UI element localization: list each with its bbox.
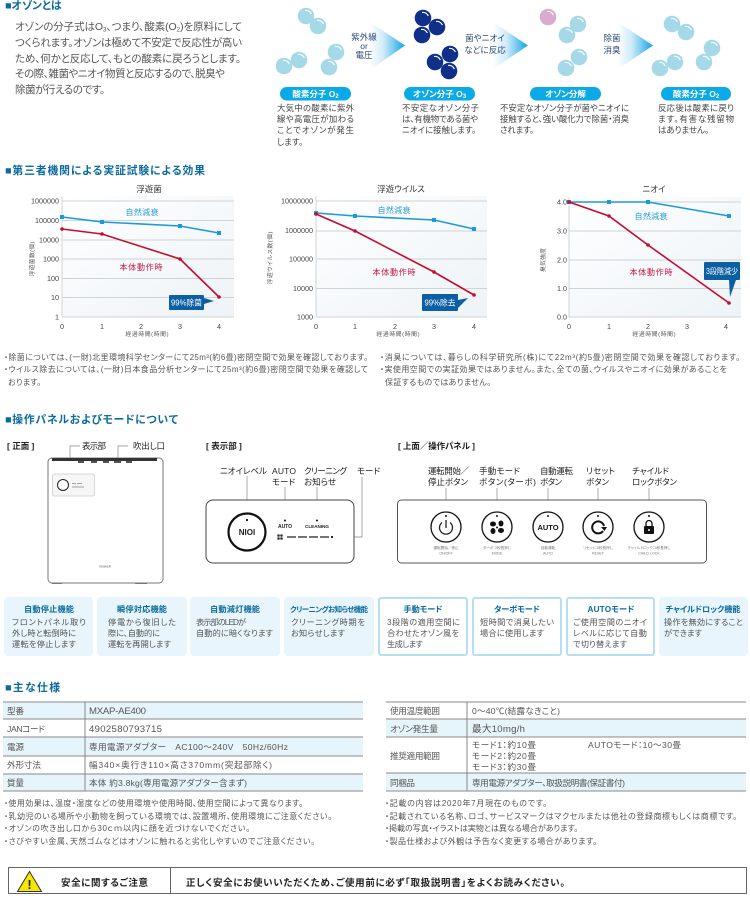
- chart: airborne virus: 1000: [297, 312, 313, 322]
- device front: [48, 458, 163, 584]
- table: specs right: モード2：約20畳: [472, 750, 536, 761]
- card: cleaning notice: お知らせします: [291, 628, 345, 638]
- panel: front view: [7, 441, 165, 584]
- chart: odor: 0.0: [557, 312, 567, 322]
- chart: airborne virus: 浮遊ウイルス数(個): [266, 231, 274, 284]
- chart: airborne bacteria: 浮遊菌: [136, 184, 162, 194]
- table: specs left: 幅340×奥行き110×高さ370mm(突起部除く): [89, 759, 272, 770]
- card: manual mode: 手動モード: [404, 604, 443, 614]
- card: manual mode: 合わせたオゾン風を: [387, 628, 459, 638]
- chart: airborne bacteria: 100000: [35, 216, 59, 225]
- chart: airborne bacteria: 3: [178, 322, 182, 331]
- arrow: sterilize and deodorize: 消臭: [603, 45, 621, 55]
- card: auto mode: で切り替えます: [573, 639, 627, 649]
- chart: airborne virus: 10000: [293, 284, 313, 293]
- text block: ozone description: )を原料にして: [180, 20, 242, 33]
- step 2: ozone molecule: [402, 87, 479, 135]
- heading: main specs: ■主な仕様: [5, 680, 60, 694]
- panel: display: モード: [357, 466, 380, 476]
- step 1: oxygen molecule: 大気中の酸素に紫外: [277, 103, 355, 113]
- table: specs left: 型番: [7, 705, 24, 716]
- step 4: back to oxygen: はありません。: [658, 125, 709, 135]
- display box: NIOI: [239, 528, 255, 537]
- control box: 自動運転: [541, 545, 556, 550]
- chart: airborne bacteria: 0: [60, 322, 64, 331]
- text block: spec notes left: ・さびやすい金属、天然ゴムなどはオゾンに触れると劣化しやすいのでご注意ください。: [4, 836, 315, 846]
- step 2: ozone molecule: 不安定なオゾン分子: [402, 103, 479, 113]
- chart: airborne bacteria: 1000000: [31, 196, 59, 206]
- panel: display: モード: [272, 477, 295, 487]
- step 4: back to oxygen: [658, 87, 734, 135]
- card: auto mode: AUTOモード: [588, 605, 635, 614]
- panel: top control panel: ボタン(ターボ): [479, 477, 536, 487]
- text block: spec notes left: ・乳幼児のいる場所や小動物を飼っている環境では、設置場所、使用環境にご注意ください。: [4, 811, 332, 821]
- icon: auto: AUTO: [537, 523, 559, 532]
- step 3: ozone decomposition: オゾン分解: [545, 89, 586, 99]
- chart: odor: 1: [607, 322, 611, 331]
- panel: top control panel: 運転開始／: [428, 466, 469, 476]
- display box: [206, 500, 354, 563]
- step 1: oxygen molecule: 酸素分子 O: [292, 89, 335, 99]
- chart: airborne virus: 1000000: [285, 226, 313, 235]
- text block: ozone description: オゾンの分子式はO: [15, 21, 103, 33]
- chart: airborne virus: 経過時間(時間): [376, 330, 420, 338]
- table: specs right: 最大10mg/h: [472, 723, 525, 735]
- chart: airborne bacteria: 100: [47, 274, 59, 283]
- card: auto stop: フロントパネル取り: [12, 618, 86, 627]
- text block: ozone description: 3: [103, 26, 107, 34]
- panel: display: クリーニング: [304, 466, 348, 476]
- chart: airborne virus: 100000: [289, 254, 313, 264]
- panel: top control panel: 停止ボタン: [428, 477, 468, 487]
- icon: warning triangle: !: [27, 877, 32, 892]
- control box: RESET: [592, 552, 605, 556]
- text block: test notes left: ・除菌については、(一財)北里環境科学センターにて25m³(約6畳)密閉空間で効果を確認しております。: [4, 352, 368, 362]
- control box: CHILD LOCK: [638, 552, 660, 556]
- panel: top control panel: ロックボタン: [632, 477, 677, 487]
- step 1: oxygen molecule: 線や高電圧が加わる: [277, 114, 354, 124]
- card: cleaning notice: クリーニングお知らせ機能: [290, 604, 368, 614]
- arrow: reaction with bacteria and odor: などに反応: [464, 45, 506, 55]
- table: specs right: 使用温度範囲: [390, 705, 440, 716]
- chart: odor: 臭気強度: [539, 248, 547, 272]
- callout: 99% bacteria removed: [169, 295, 214, 310]
- cards: functions and modes: [4, 597, 748, 656]
- chart: odor: 2: [646, 322, 650, 331]
- card: cleaning notice: クリーニング時期を: [291, 617, 365, 627]
- panel: top control panel: 手動モード: [479, 466, 520, 476]
- card: cleaning notice: [284, 597, 374, 656]
- chart: odor: 経過時間(時間): [632, 330, 676, 338]
- safety notice: [8, 867, 746, 894]
- arrow: UV or high voltage: 電圧: [355, 50, 373, 60]
- chart: airborne virus: 2: [393, 322, 397, 331]
- card: auto mode: ご使用空間のニオイ: [573, 617, 647, 627]
- card: power recovery: 運転を再開します: [108, 639, 171, 649]
- control box: ターボ：2秒長押し: [483, 545, 512, 550]
- chart: odor: 2.0: [557, 256, 567, 264]
- callout: 99% virus removed: 99%除去: [424, 298, 456, 308]
- text block: spec notes left: ・オゾンの吹き出し口から30ｃｍ以内に顔を近づけないでください。: [4, 823, 250, 833]
- step 3: ozone decomposition: されます。: [500, 125, 534, 135]
- step 2: ozone molecule: ニオイに接触します。: [402, 125, 476, 135]
- safety notice: 正しく安全にお使いいただくため、ご使用前に必ず「取扱説明書」をよくお読みください。: [186, 877, 565, 889]
- control box: AUTO: [543, 552, 553, 556]
- step 4: back to oxygen: 2: [716, 94, 720, 100]
- display box: AUTO: [278, 524, 292, 530]
- step 3: ozone decomposition: [500, 87, 630, 135]
- text block: spec notes right: ・製品仕様および外観は予告なく変更する場合があります。: [385, 836, 597, 846]
- panel: top control panel: ボタン: [586, 477, 609, 487]
- table: specs left: 本体 約3.8kg(専用電源アダプター含まず): [89, 777, 247, 788]
- chart: airborne bacteria: 10: [51, 293, 59, 302]
- step 2: ozone molecule: オゾン分子 O: [413, 89, 463, 99]
- table: specs left: 電源: [7, 742, 24, 752]
- heading: ozone: ■オゾンとは: [5, 0, 62, 12]
- card: manual mode: [379, 598, 467, 655]
- table: specs right: [386, 702, 746, 791]
- card: auto stop: 外し時と転倒時に: [12, 628, 76, 638]
- card: power recovery: [97, 597, 187, 656]
- heading: control panel and modes: ■操作パネルおよびモードについて: [5, 412, 178, 426]
- chart: airborne bacteria: 本体動作時: [120, 262, 162, 272]
- card: child lock: [659, 597, 748, 656]
- control box: MODE: [492, 552, 503, 556]
- table: specs right: オゾン発生量: [390, 723, 438, 734]
- panel: display: ニオイレベル: [220, 466, 268, 476]
- text block: ozone description: 除菌が行えるのです。: [15, 83, 105, 96]
- control box: ON/OFF: [439, 552, 454, 556]
- panel: top control panel: 自動運転: [540, 466, 573, 476]
- panel: front view: [ 正面 ]: [7, 441, 35, 451]
- table: specs right: AUTOモード：10～30畳: [588, 740, 681, 750]
- step 4: back to oxygen: ます。有害な残留物: [658, 114, 734, 124]
- table: specs left: 質量: [7, 778, 24, 788]
- card: auto mode: [567, 598, 654, 655]
- diagram: ozone process: [276, 8, 734, 147]
- card: turbo mode: 場合に使用します: [480, 628, 544, 638]
- chart: airborne virus: 10000000: [281, 196, 313, 206]
- card: child lock: チャイルドロック機能: [665, 604, 740, 614]
- step 3: ozone decomposition: 不安定なオゾン分子が菌やニオイに: [500, 103, 629, 113]
- panel: top control panel: リセット: [586, 466, 615, 476]
- table: specs left: 外形寸法: [7, 759, 41, 770]
- text block: ozone description: 2: [177, 26, 181, 34]
- device front: maxell: [99, 564, 111, 568]
- arrow: UV or high voltage: 紫外線: [351, 32, 377, 42]
- step 1: oxygen molecule: 2: [335, 94, 339, 100]
- table: specs right: 推奨適用範囲: [390, 750, 440, 761]
- card: auto stop: 運転を停止します: [12, 639, 76, 649]
- panel: front view: 表示部: [82, 441, 106, 451]
- table: specs left: [3, 702, 363, 791]
- text block: ozone description: 、つまり、酸素(O: [106, 20, 177, 33]
- step 1: oxygen molecule: [277, 87, 355, 147]
- panel: top control panel: チャイルド: [632, 466, 669, 476]
- text block: ozone description: その際、雑菌やニオイ物質と反応するので、脱臭や: [15, 67, 225, 80]
- chart: airborne virus: 本体動作時: [372, 267, 416, 277]
- chart: airborne bacteria: 1: [55, 312, 59, 322]
- icon: fan: [490, 520, 504, 534]
- arrow: UV or high voltage: [351, 22, 405, 70]
- icon: power: [440, 520, 453, 534]
- text block: test notes right: ・消臭については、暮らしの科学研究所(株)にて22m³(約5畳)密閉空間で効果を確認しております。: [380, 352, 740, 362]
- chart: airborne bacteria: 4: [217, 322, 221, 331]
- panel: front view: 吹出し口: [133, 441, 165, 451]
- panel: top control panel: ボタン: [540, 477, 562, 487]
- card: auto stop: [4, 597, 93, 656]
- card: power recovery: 瞬停対応機能: [117, 604, 167, 614]
- text block: spec notes left: [4, 798, 332, 846]
- arrow: reaction with bacteria and odor: [464, 22, 528, 69]
- chart: odor: 3.0: [557, 226, 567, 236]
- panel: display: [206, 441, 380, 563]
- molecules: oxygen: [276, 8, 344, 75]
- chart: odor: 自然減衰: [634, 211, 668, 221]
- chart: airborne bacteria: [28, 184, 234, 338]
- icon: reset: [592, 521, 607, 533]
- table: specs left: 専用電源アダプター AC100～240V 50Hz/60Hz: [89, 741, 288, 752]
- callout: 3-level reduction: 3段階減少: [706, 266, 738, 276]
- text block: spec notes right: [385, 798, 737, 846]
- icon: warning triangle: [18, 872, 42, 892]
- control box: チャイルドロック：3秒長押し: [628, 545, 671, 550]
- text block: spec notes right: ・記載の内容は2020年7月現在のものです。: [385, 798, 547, 808]
- text block: test notes right: [380, 352, 740, 387]
- callout: 99% virus removed: [422, 294, 468, 311]
- card: manual mode: 3段階の適用空間に: [387, 617, 460, 627]
- step 1: oxygen molecule: ことでオゾンが発生: [277, 125, 354, 135]
- text block: spec notes left: ・使用効果は、温度・湿度などの使用環境や使用時間、使用空間によって異なります。: [4, 798, 303, 808]
- chart: airborne bacteria: 浮遊菌数(個): [28, 241, 36, 276]
- control box: [398, 500, 706, 563]
- text block: spec notes right: ・記載されている名称、ロゴ、サービスマークはマクセルまたは他社の登録商標もしくは商標です。: [385, 811, 737, 821]
- card: turbo mode: ターボモード: [494, 604, 540, 614]
- arrow: UV or high voltage: or: [360, 41, 368, 51]
- callout: 99% bacteria removed: 99%除菌: [171, 298, 202, 308]
- callout: 3-level reduction: [704, 262, 740, 297]
- card: child lock: ができます: [664, 628, 702, 638]
- step 4: back to oxygen: 酸素分子 O: [673, 89, 716, 99]
- text block: ozone description: ため、何かと反応して、もとの酸素に戻ろうとします。: [15, 52, 241, 65]
- step 1: oxygen molecule: します。: [277, 137, 303, 147]
- control box: リセット：2秒長押し: [583, 545, 613, 550]
- chart: odor: 0: [567, 322, 571, 331]
- chart: odor: 3: [685, 322, 689, 331]
- control box: 運転開始／停止: [433, 545, 459, 550]
- text block: test notes left: おります。: [8, 378, 41, 387]
- card: auto mode: レベルに応じて自動: [573, 628, 647, 638]
- card: auto dimming: 表示部のLEDが: [196, 617, 246, 627]
- table: specs left: MXAP-AE400: [89, 706, 146, 717]
- arrow: reaction with bacteria and odor: 菌やニオイ: [465, 33, 505, 43]
- chart: odor: 4: [724, 322, 728, 331]
- heading: third-party test: ■第三者機関による実証試験による効果: [5, 163, 205, 177]
- chart: airborne virus: 0: [314, 322, 318, 331]
- chart: odor: 本体動作時: [630, 267, 672, 277]
- text block: spec notes right: ・掲載の写真・イラストは実物とは異なる場合があります。: [385, 823, 578, 833]
- chart: airborne virus: [266, 184, 487, 338]
- card: manual mode: 生成します: [387, 639, 423, 649]
- card: power recovery: 停電から復旧した: [108, 617, 176, 627]
- step 3: ozone decomposition: 接触すると、強い酸化力で除菌・消臭: [500, 114, 630, 124]
- card: power recovery: 際に、自動的に: [108, 628, 160, 638]
- chart: odor: 1.0: [557, 284, 567, 293]
- card: turbo mode: [473, 598, 561, 655]
- table: specs right: 0～40℃(結露なきこと): [472, 705, 560, 716]
- chart: airborne bacteria: 1: [100, 322, 104, 331]
- panel: display: [ 表示部 ]: [206, 441, 242, 451]
- step 4: back to oxygen: 反応後は酸素に戻り: [658, 103, 734, 113]
- table: specs right: モード3：約30畳: [472, 761, 536, 772]
- chart: airborne virus: 浮遊ウイルス: [377, 184, 425, 194]
- chart: airborne virus: 自然減衰: [378, 205, 410, 215]
- card: auto stop: 自動停止機能: [24, 604, 74, 614]
- text block: ozone description: つくられます。オゾンは極めて不安定で反応性が高い: [15, 36, 242, 49]
- chart: airborne bacteria: 1000: [43, 254, 59, 264]
- icon: lock: [644, 520, 654, 534]
- table: specs right: 専用電源アダプター、取扱説明書(保証書付): [472, 777, 625, 788]
- card: auto dimming: [190, 597, 280, 656]
- table: specs right: 同梱品: [390, 777, 415, 788]
- card: turbo mode: 短時間で消臭したい: [480, 617, 554, 627]
- chart: odor: ニオイ: [642, 184, 666, 194]
- display box: CLEANING: [305, 524, 329, 529]
- card: auto dimming: 自動減灯機能: [210, 604, 260, 614]
- molecules: ozone: [414, 10, 458, 79]
- panel: display: お知らせ: [304, 477, 336, 487]
- step 2: ozone molecule: 3: [463, 94, 467, 100]
- chart: airborne virus: 3: [432, 322, 436, 331]
- molecules: ozone decomposition: [540, 9, 587, 76]
- table: specs left: 4902580793715: [89, 724, 162, 735]
- table: specs right: モード1：約10畳: [472, 739, 536, 750]
- chart: airborne virus: 4: [472, 322, 476, 331]
- safety notice: 安全に関するご注意: [61, 877, 148, 889]
- arrow: sterilize and deodorize: [603, 22, 653, 69]
- chart: airborne bacteria: 経過時間(時間): [126, 330, 169, 338]
- text block: test notes right: 保証するものではありません。: [385, 377, 491, 387]
- text block: test notes left: ・ウイルス除去については、(一財)日本食品分析センターにて25m³(約6畳)密閉空間で効果を確認して: [4, 364, 368, 374]
- molecules: oxygen after: [652, 16, 720, 76]
- chart: airborne bacteria: 10000: [39, 236, 59, 244]
- card: auto dimming: 自動的に暗くなります: [196, 628, 273, 638]
- panel: top control panel: [398, 441, 706, 563]
- arrow: sterilize and deodorize: 除菌: [603, 33, 621, 43]
- panel: top control panel: [ 上面／操作パネル ]: [398, 441, 475, 451]
- card: child lock: 操作を無効にすること: [664, 617, 743, 627]
- text block: test notes left: [4, 352, 368, 387]
- table: specs left: JANコード: [7, 724, 45, 734]
- chart: airborne bacteria: 2: [139, 322, 143, 331]
- chart: airborne virus: 1: [353, 322, 357, 331]
- chart: odor: [539, 184, 741, 338]
- text block: ozone description: [15, 20, 242, 96]
- panel: display: AUTO: [272, 466, 296, 476]
- chart: odor: 4.0: [557, 198, 567, 206]
- text block: test notes right: ・実使用空間での実証効果ではありません。また、全ての菌、ウイルスやニオイに効果があることを: [380, 364, 728, 374]
- step 2: ozone molecule: は、有機物である菌や: [402, 114, 478, 124]
- chart: airborne bacteria: 自然減衰: [126, 207, 158, 217]
